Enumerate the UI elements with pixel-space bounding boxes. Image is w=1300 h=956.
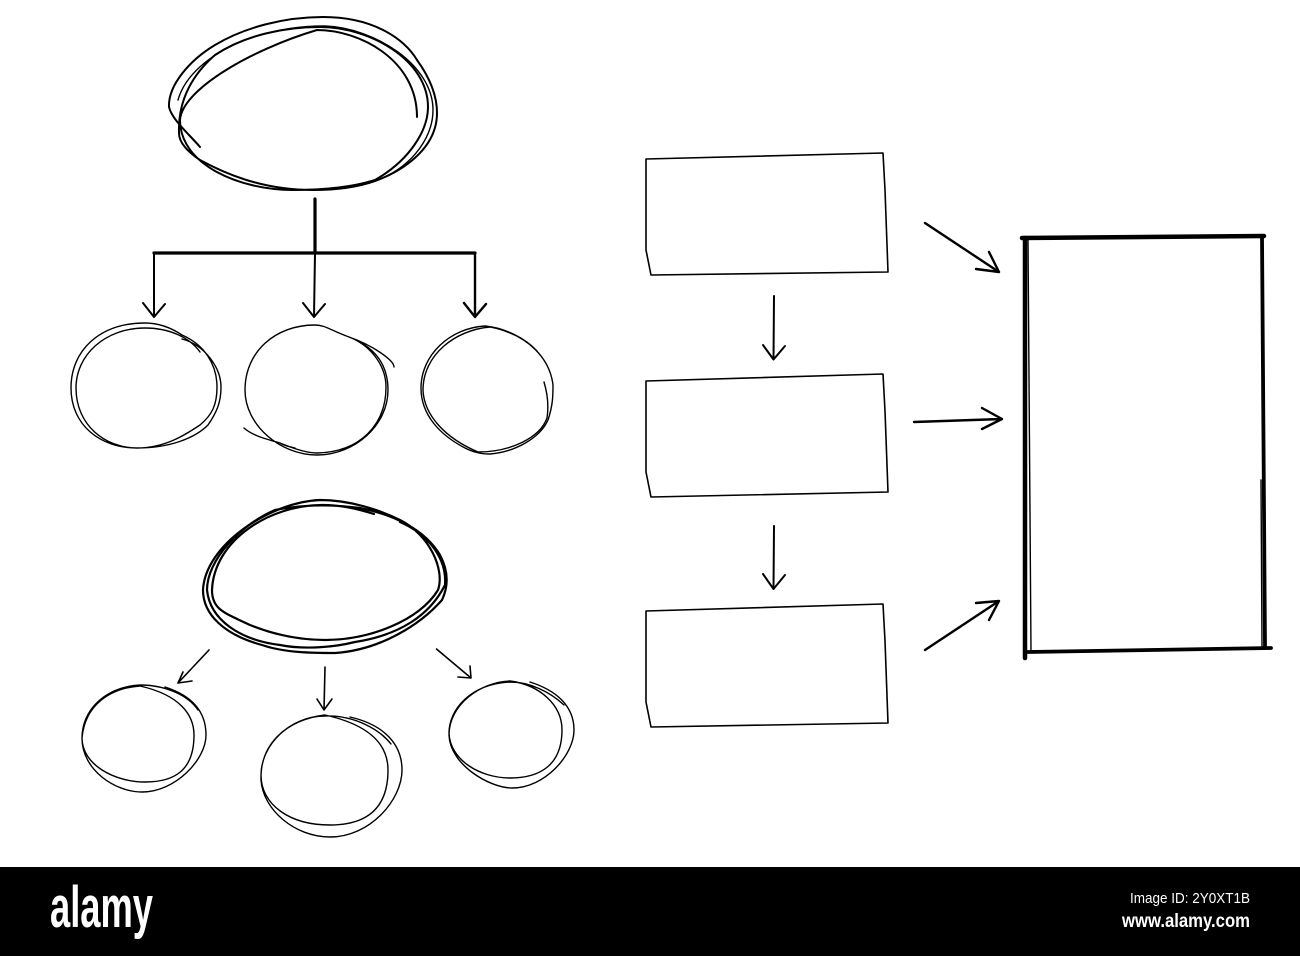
arrow from box three (925, 601, 999, 650)
right lower circle (449, 681, 574, 788)
arrow from box one (925, 223, 999, 272)
box one (646, 153, 888, 275)
three angled arrows (178, 649, 471, 710)
top scribbled oval (169, 17, 437, 190)
panel: large tall rectangle (1022, 236, 1271, 658)
website: www.alamy.com (1121, 911, 1250, 932)
lower scribbled oval (203, 500, 447, 653)
left small circle (71, 323, 221, 448)
panel: flow of three boxes (646, 153, 888, 727)
middle lower circle (261, 715, 402, 837)
middle small circle (244, 325, 394, 455)
footer logo: alamy (50, 875, 153, 940)
left lower circle (82, 685, 206, 792)
right small circle (421, 326, 553, 454)
footer bar (0, 867, 1300, 956)
box three (646, 604, 888, 727)
arrow from box two (914, 408, 1002, 429)
panel: upper-left tree diagram (71, 17, 553, 455)
box two (646, 374, 888, 497)
connector lines with three arrows (143, 199, 486, 317)
arrow down two (763, 526, 785, 589)
image id: Image ID: 2Y0XT1B (1130, 890, 1250, 907)
arrow down one (763, 296, 785, 360)
panel: lower-left tree diagram (82, 500, 574, 837)
panel: converging arrows (914, 223, 1002, 650)
